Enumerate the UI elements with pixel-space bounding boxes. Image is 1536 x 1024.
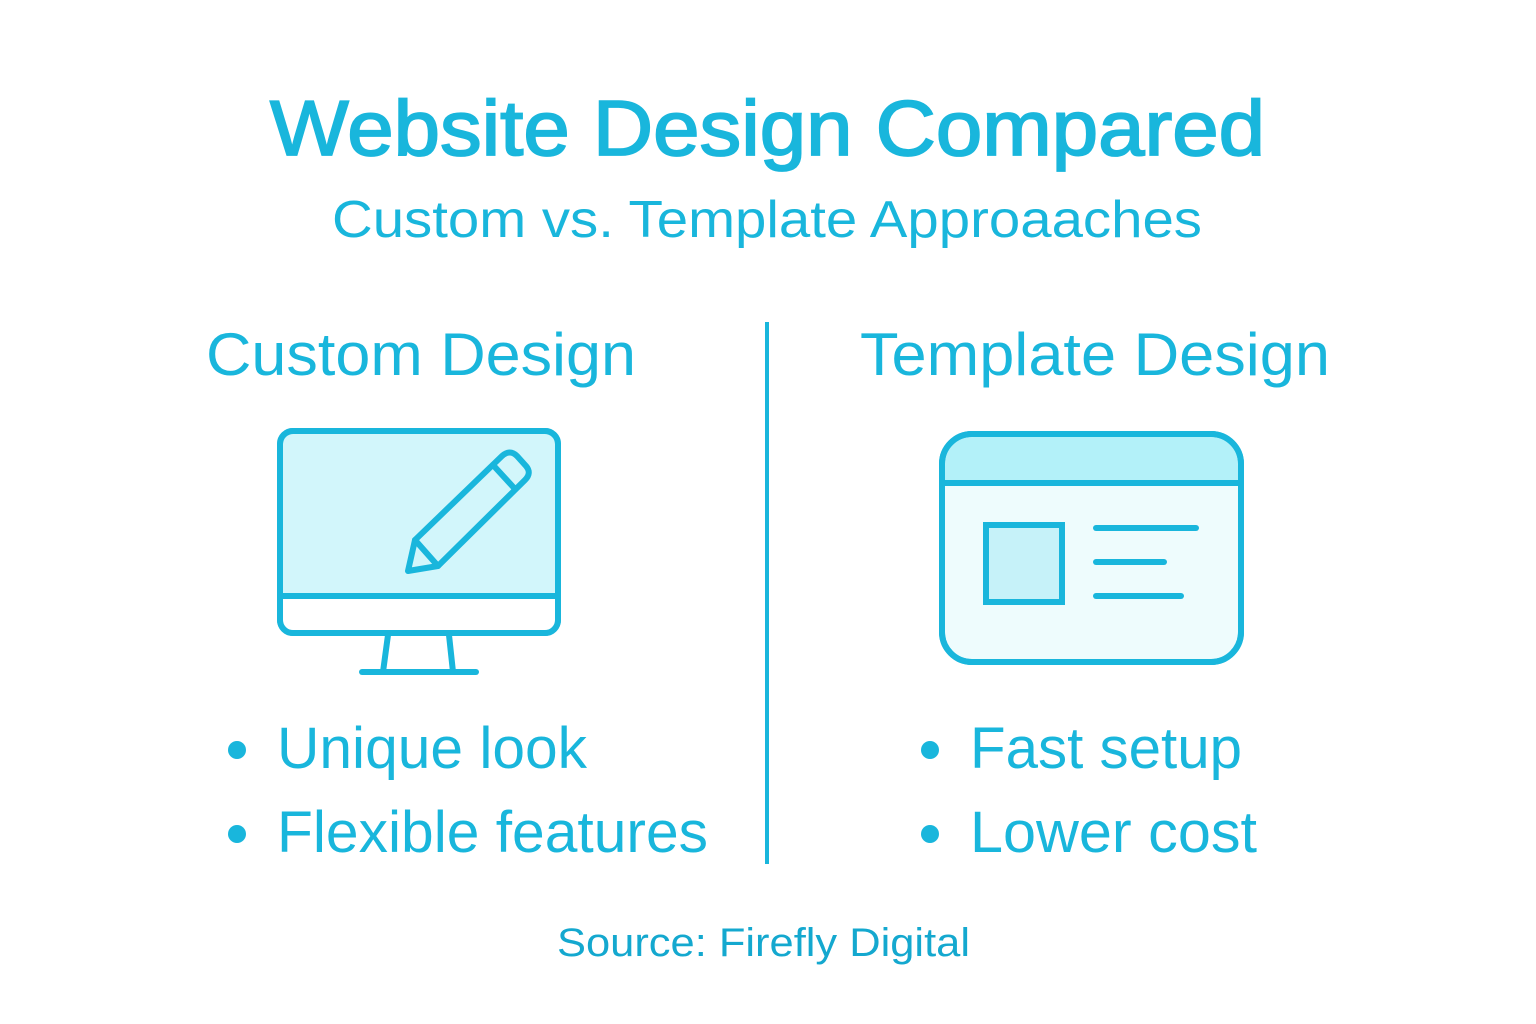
bullet list: custom	[228, 716, 708, 865]
divider	[765, 322, 769, 864]
title: Website Design Compared	[270, 84, 1265, 172]
panel: template design	[860, 321, 1330, 865]
heading: custom design: Custom Design	[206, 321, 636, 388]
subtitle: Custom vs. Template Approaaches	[332, 191, 1202, 249]
bullet list: custom: Flexible features	[277, 800, 708, 865]
icon: browser template	[942, 434, 1241, 662]
bullet list: template	[921, 716, 1257, 865]
source note: Source: Firefly Digital	[557, 921, 970, 965]
panel: custom design	[206, 321, 708, 865]
icon: monitor with pencil	[280, 431, 558, 672]
heading: template design: Template Design	[860, 321, 1330, 388]
bullet list: custom: Unique look	[277, 716, 588, 781]
bullet list: template: Lower cost	[970, 800, 1257, 865]
bullet list: template: Fast setup	[970, 716, 1242, 781]
